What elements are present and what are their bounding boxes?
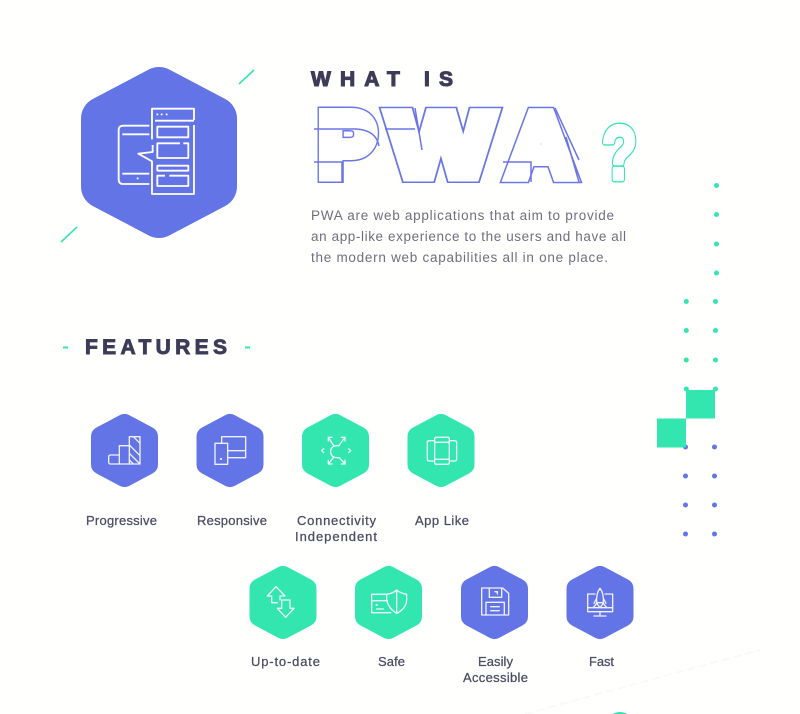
feature: app like: App Like: [415, 513, 469, 528]
feature: progressive: [86, 424, 157, 528]
description paragraph: an app-like experience to the users and have all: [311, 229, 626, 244]
feature: up-to-date: Up-to-date: [251, 654, 320, 669]
feature: fast: Fast: [589, 654, 614, 669]
feature: easily accessible: Accessible: [463, 670, 528, 685]
feature: connectivity independent: Connectivity: [297, 513, 376, 528]
partial green circle at bottom edge: [606, 712, 634, 714]
feature: easily accessible: Easily: [478, 654, 514, 669]
green squares: [657, 390, 715, 448]
title: PWA outlined: [314, 94, 579, 194]
feature: easily accessible: [463, 576, 528, 685]
faint diagonal line: [525, 650, 760, 714]
title: PWA outlined: A: [508, 94, 574, 194]
description paragraph: the modern web capabilities all in one place.: [311, 250, 608, 265]
accent slash bottom left: [61, 227, 77, 242]
accent slash top right: [239, 70, 254, 84]
heading: what is: WHAT IS: [311, 68, 453, 91]
description paragraph: PWA are web applications that aim to provide: [311, 208, 614, 223]
features heading: FEATURES: [85, 336, 227, 359]
feature: responsive: Responsive: [197, 513, 267, 528]
title: PWA outlined: W: [390, 94, 492, 194]
feature: progressive: Progressive: [86, 513, 157, 528]
blue dot grid: [683, 444, 717, 536]
question mark: ?: [602, 111, 637, 196]
feature: safe: Safe: [378, 654, 405, 669]
title: PWA outlined: W: [390, 94, 492, 194]
icon: browser and phone: [119, 109, 194, 194]
feature: app like: [415, 424, 469, 528]
feature: safe: [365, 576, 412, 669]
feature: fast: [576, 576, 624, 669]
question mark: ?: [602, 111, 637, 196]
title: PWA outlined: P: [319, 94, 375, 194]
title: PWA outlined: A: [508, 94, 574, 194]
feature: up-to-date: [251, 576, 320, 669]
feature: connectivity independent: Independent: [295, 529, 377, 544]
description paragraph: [311, 208, 626, 265]
feature: connectivity independent: [295, 424, 377, 544]
title: PWA outlined: P: [319, 94, 375, 194]
extrusion lines: [314, 108, 579, 182]
hero hexagon with app icon: [103, 89, 215, 216]
green dot column: [684, 183, 719, 392]
feature: responsive: [197, 424, 267, 528]
